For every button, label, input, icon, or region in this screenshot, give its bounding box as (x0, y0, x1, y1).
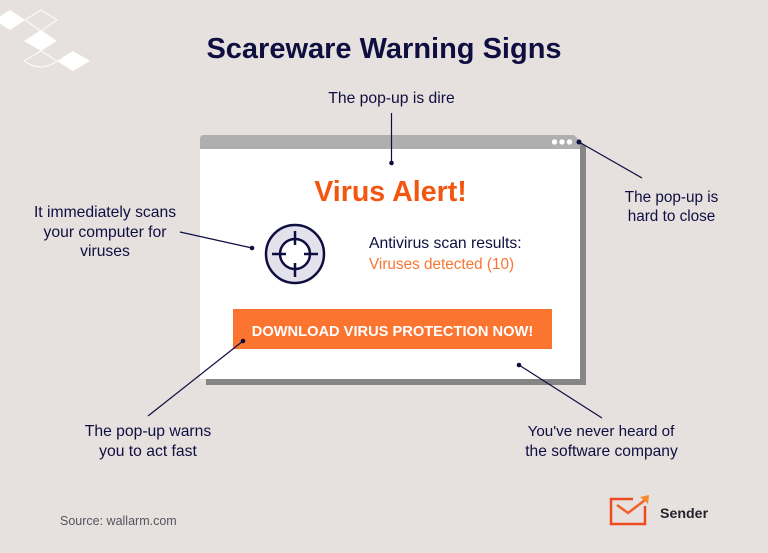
pop-up window (200, 135, 586, 385)
callout: dire (328, 90, 455, 165)
scan results (369, 235, 522, 273)
title bar (200, 135, 580, 149)
window shadow (206, 141, 586, 385)
icon: target (266, 225, 324, 283)
callout: dire: The pop-up is dire (328, 90, 455, 107)
callout: act fast: The pop-up warns (85, 423, 211, 440)
callout: scans: It immediately scans (34, 204, 176, 221)
callout: act fast (85, 339, 245, 460)
callout: software company: You've never heard of (528, 423, 675, 440)
download button (233, 309, 552, 349)
callout: hard to close: The pop-up is (625, 189, 719, 206)
source: Source: wallarm.com (60, 514, 177, 528)
callout: scans: viruses (80, 243, 130, 260)
callout: scans: your computer for (44, 224, 166, 241)
callout: software company: the software company (525, 443, 678, 460)
window body (200, 145, 580, 379)
window dots (552, 139, 572, 145)
decorative diamonds (0, 10, 90, 71)
scan results: Antivirus scan results: (369, 235, 522, 252)
callout: hard to close: hard to close (628, 208, 715, 225)
alert heading: Virus Alert! (314, 176, 467, 208)
title: Scareware Warning Signs (206, 33, 562, 65)
callout: act fast: you to act fast (99, 443, 197, 460)
download button: DOWNLOAD VIRUS PROTECTION NOW! (252, 324, 533, 340)
callout: software company (517, 363, 678, 460)
scan results: Viruses detected (10) (369, 256, 514, 273)
logo: Sender: Sender (660, 506, 709, 522)
callout: hard to close (576, 140, 719, 225)
callout: scans (34, 204, 254, 260)
logo: Sender (611, 495, 709, 524)
